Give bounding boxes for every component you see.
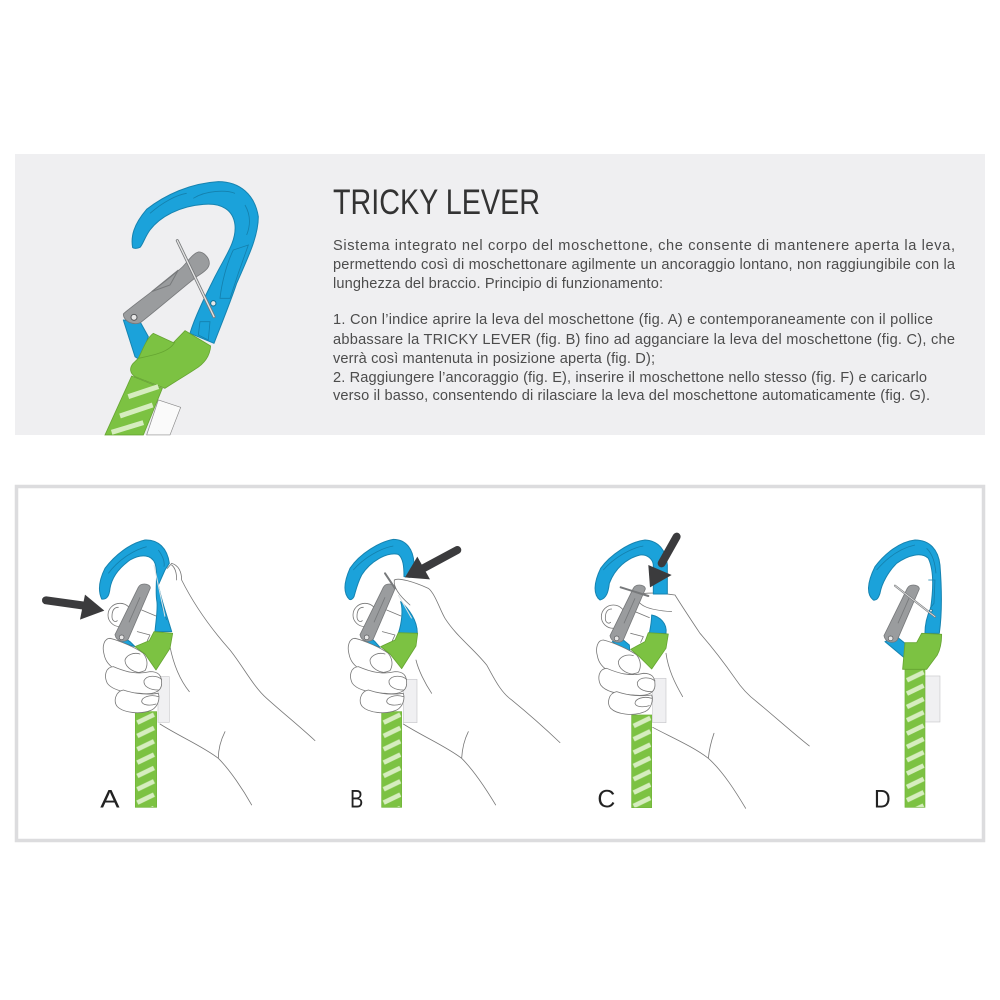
hanging label bbox=[147, 400, 181, 435]
description text: Sistema integrato nel corpo del moschettone, che consente di mantenere aperta la leva, bbox=[333, 238, 955, 254]
sling bbox=[905, 669, 925, 807]
title: TRICKY LEVER bbox=[333, 182, 540, 222]
top panel background bbox=[15, 154, 985, 435]
arrow bbox=[423, 550, 457, 568]
description text: 1. Con l’indice aprire la leva del moschettone (fig. A) e contemporaneamente con il pollice bbox=[333, 312, 933, 328]
green cap bbox=[131, 331, 211, 388]
description text: abbassare la TRICKY LEVER (fig. B) fino ad agganciare la leva del moschettone (fig. C), che bbox=[333, 332, 955, 348]
label bbox=[403, 679, 417, 723]
lever bbox=[123, 252, 209, 324]
sling bbox=[135, 712, 157, 807]
carabiner illustration bbox=[105, 182, 258, 435]
forearm and thumb bbox=[395, 579, 560, 805]
fingers bbox=[103, 603, 162, 713]
sling bbox=[632, 715, 652, 808]
carabiner bbox=[868, 540, 942, 633]
bottom panel frame bbox=[16, 486, 984, 840]
green cap bbox=[381, 633, 418, 669]
letter A: A bbox=[100, 787, 120, 814]
green cap bbox=[631, 633, 668, 669]
figure D bbox=[868, 540, 942, 814]
carabiner bbox=[345, 539, 414, 600]
fingers bbox=[597, 605, 655, 714]
sling bbox=[105, 376, 162, 435]
letter C: C bbox=[597, 787, 615, 814]
green cap bbox=[903, 633, 942, 669]
description text: verso il basso, consentendo di rilasciare la leva del moschettone automaticamente (fig. G). bbox=[333, 388, 930, 404]
lever bbox=[884, 585, 919, 642]
safety pin bbox=[177, 241, 214, 317]
description text: verrà così mantenuta in posizione aperta (fig. D); bbox=[333, 351, 655, 367]
green cap bbox=[135, 632, 173, 670]
arrow bbox=[662, 537, 677, 563]
figure B bbox=[345, 539, 560, 814]
label bbox=[925, 676, 940, 722]
letter B: B bbox=[350, 787, 363, 814]
fingers bbox=[348, 603, 407, 713]
description text: permettendo così di moschettonare agilmente un ancoraggio lontano, non raggiungibile con la bbox=[333, 257, 956, 273]
letter D: D bbox=[874, 787, 891, 814]
safety pin bbox=[154, 565, 165, 617]
figure A bbox=[46, 540, 315, 814]
carabiner bbox=[595, 540, 667, 600]
safety pin bbox=[621, 587, 648, 596]
lever bbox=[115, 584, 150, 641]
arrow bbox=[46, 600, 87, 606]
description text: 2. Raggiungere l’ancoraggio (fig. E), inserire il moschettone nello stesso (fig. F) e caricarlo bbox=[333, 370, 927, 386]
figure C bbox=[595, 537, 809, 814]
label bbox=[653, 678, 666, 723]
lever bbox=[360, 584, 395, 641]
blue carabiner body bbox=[132, 182, 258, 343]
carabiner bbox=[99, 540, 172, 632]
sling bbox=[382, 712, 402, 807]
label bbox=[158, 677, 169, 722]
safety pin bbox=[895, 586, 935, 617]
description text: lunghezza del braccio. Principio di funzionamento: bbox=[333, 276, 663, 292]
description text bbox=[333, 238, 956, 404]
lever bbox=[610, 585, 645, 642]
safety pin bbox=[385, 573, 395, 588]
forearm and thumb bbox=[160, 563, 315, 805]
forearm and thumb bbox=[638, 595, 809, 808]
